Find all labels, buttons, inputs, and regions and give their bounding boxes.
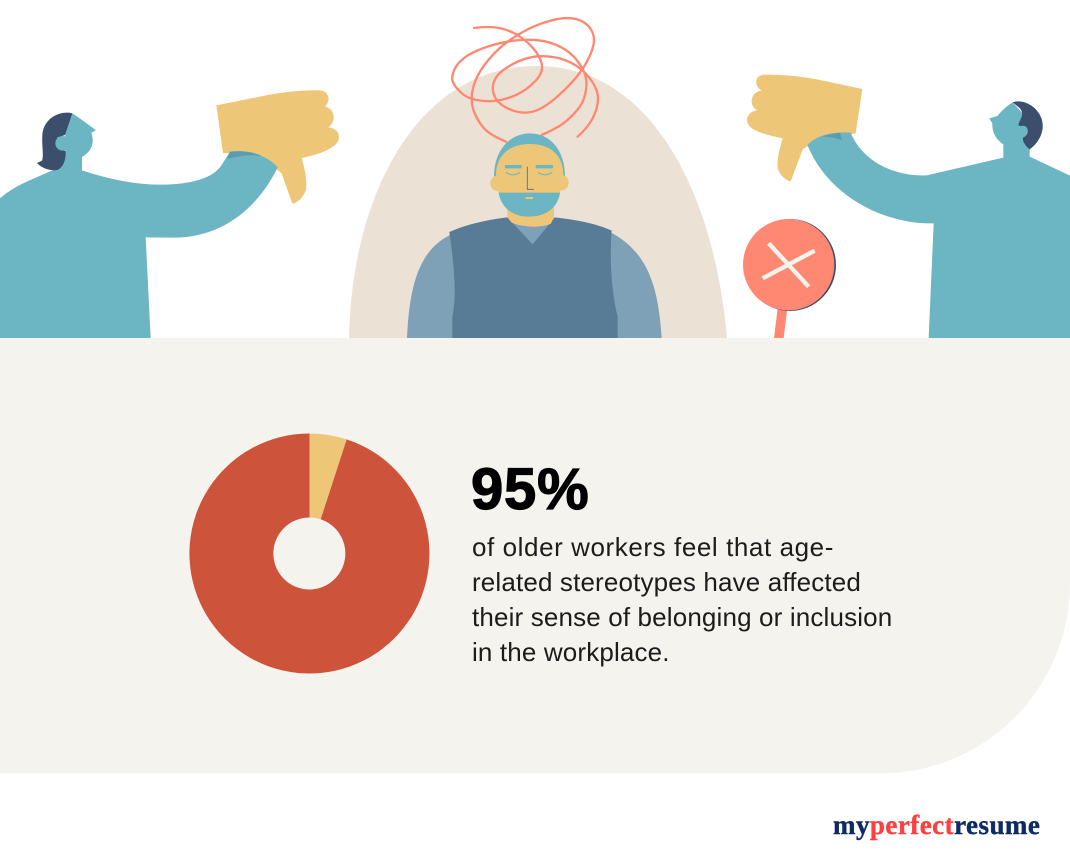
panel: statistic background: [0, 338, 1070, 774]
vest: [449, 217, 618, 338]
illustration: left person giving thumbs down: [0, 90, 339, 338]
logo: myperfectresume: myperfectresume: [833, 810, 1040, 840]
pie chart: 95 percent: [189, 434, 429, 674]
left sleeve shadow: [227, 151, 262, 159]
left person body and arm: [0, 113, 278, 338]
illustration: central stressed man: [407, 18, 662, 338]
shirt collar: [512, 223, 551, 245]
body text: in the workplace.: [472, 637, 670, 667]
hair: [494, 133, 565, 177]
sign pole: [774, 308, 787, 338]
body text: of older workers feel that age-: [472, 532, 834, 562]
left person ear: [55, 136, 70, 151]
body text: their sense of belonging or inclusion: [472, 602, 892, 632]
mouth: [526, 197, 533, 199]
left person hair: [37, 113, 72, 170]
heading: 95%: 95%: [471, 457, 590, 522]
illustration: right person giving thumbs down: [743, 75, 1070, 338]
face: [496, 144, 563, 193]
right thumbs-down hand: [747, 75, 862, 181]
ears: [490, 176, 504, 191]
right person hair: [1013, 101, 1043, 149]
sign cross: [763, 243, 815, 287]
sign shadow: [744, 219, 836, 311]
neck: [507, 200, 554, 230]
body text: related stereotypes have affected: [472, 567, 861, 597]
pie slice 5%: [310, 434, 347, 519]
beard: [499, 193, 560, 217]
pie slice 95%: [189, 434, 429, 674]
sleeves: [407, 232, 662, 338]
neck front: [507, 217, 554, 226]
right person body and arm: [807, 102, 1070, 338]
right sleeve shadow: [822, 133, 842, 140]
left thumbs-down hand: [216, 90, 339, 204]
eyes and nose: [506, 167, 552, 189]
sign disc: [743, 219, 834, 310]
beige arch behind central figure: [349, 66, 727, 338]
eyebrows: [505, 165, 553, 168]
body text: [472, 532, 892, 667]
scribble above head: [452, 18, 598, 142]
